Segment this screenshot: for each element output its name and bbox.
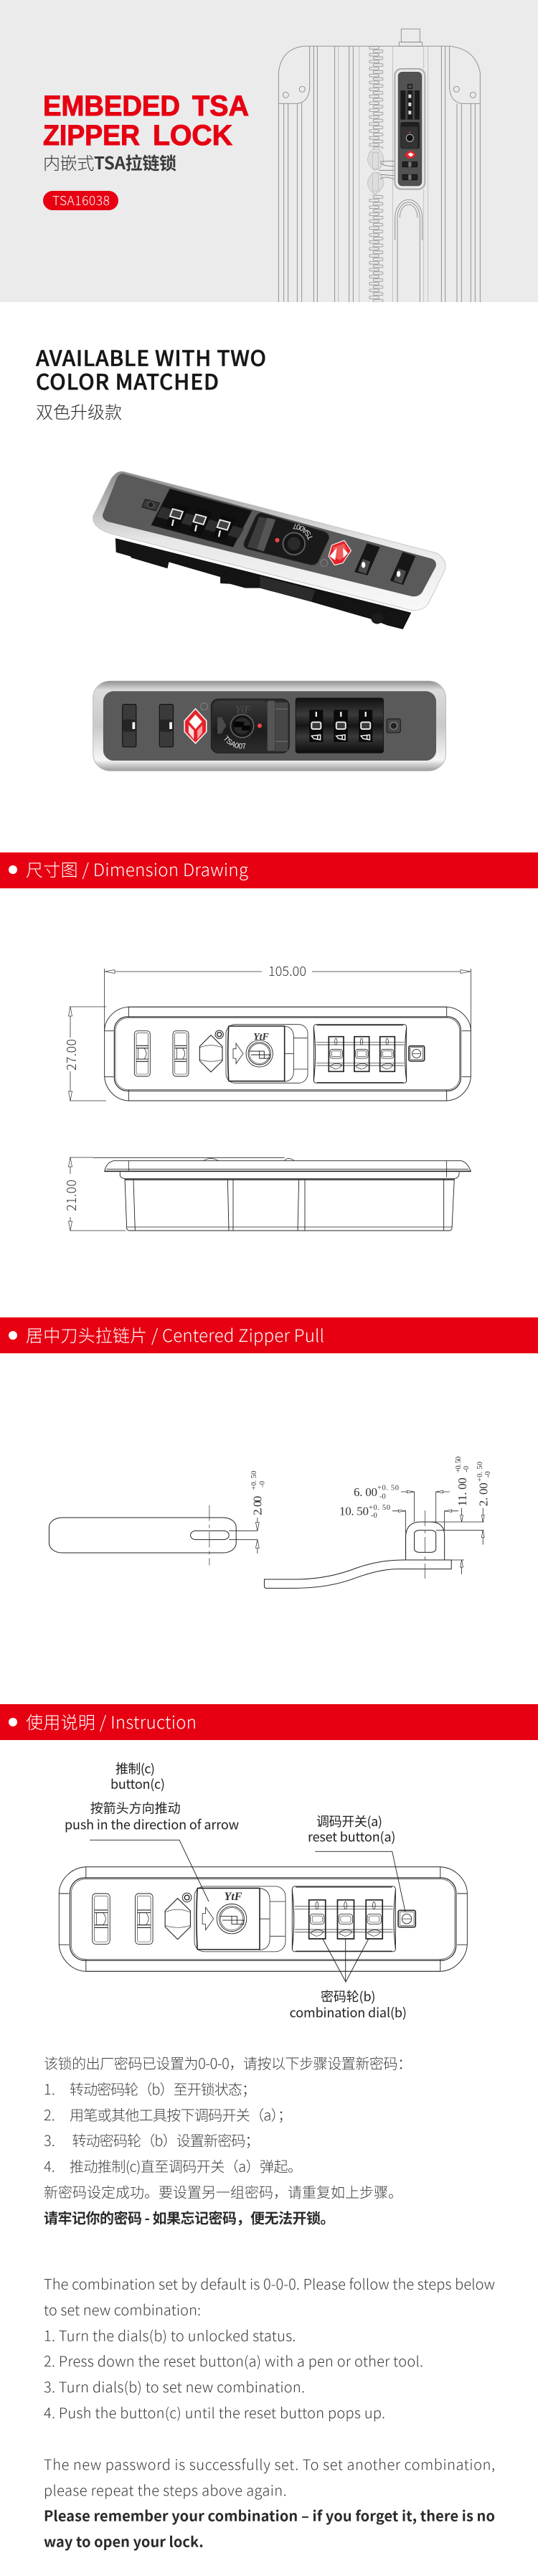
dimension: 6.00: +0. 50 xyxy=(377,1485,399,1493)
lock body underside xyxy=(116,539,410,629)
text block: English instructions: please repeat the steps above again. xyxy=(44,2479,287,2500)
text block: English instructions: 1. Turn the dials(b) to unlocked status. xyxy=(44,2325,296,2345)
callout: button c: button(c) xyxy=(110,1774,165,1793)
text block: English instructions: 3. Turn dials(b) to set new combination. xyxy=(44,2376,305,2397)
text block: English instructions xyxy=(44,2273,495,2552)
product photo: angled lock xyxy=(93,471,446,629)
diagram: lock front view with callouts xyxy=(59,1759,467,2022)
dimension: 2.00 slot: +0. 50 xyxy=(250,1471,258,1490)
combination dials xyxy=(296,698,384,753)
combination dials xyxy=(151,489,252,547)
callout: button c: 按箭头方向推动 xyxy=(90,1799,181,1818)
dimension: 2.00 slot: 2. 00 xyxy=(251,1496,265,1515)
red diamond logo xyxy=(184,703,208,743)
drawing: zipper pull side view xyxy=(264,1457,492,1588)
dimension: 11.00 xyxy=(455,1457,471,1506)
text block: English instructions: Please remember your combination – if you forget it, there is no xyxy=(44,2505,495,2526)
text block: Chinese instructions: 1. xyxy=(44,2078,55,2099)
callout: combination dial b: combination dial(b) xyxy=(290,2003,407,2022)
text block: Chinese instructions: 转动密码轮（b）设置新密码； xyxy=(72,2130,260,2150)
text block: English instructions: 4. Push the button(c) until the reset button pops up. xyxy=(44,2402,385,2422)
heading: available colours: COLOR MATCHED xyxy=(36,365,219,396)
dimension: 6.00 xyxy=(354,1485,399,1500)
callout: button c: 推制(c) xyxy=(115,1759,155,1778)
dimension: 27.00 height xyxy=(62,1007,106,1101)
section bar: dimension drawing: 尺寸图 / Dimension Drawing xyxy=(26,856,248,881)
section bar: centered zipper pull xyxy=(0,1317,538,1353)
title: ZIPPER xyxy=(43,120,140,151)
callout: combination dial b xyxy=(290,1938,407,2022)
dimension: 6.00: -0 xyxy=(379,1493,386,1500)
dimension: 2.00 xyxy=(476,1462,492,1506)
text block: English instructions: to set new combination: xyxy=(44,2299,201,2320)
text block: Chinese instructions xyxy=(44,2052,412,2227)
red diamond logo xyxy=(321,540,351,567)
callout: reset button a: 调码开关(a) xyxy=(316,1812,382,1830)
brand mark: YiF xyxy=(235,704,251,715)
dimension: 10.50: -0 xyxy=(371,1512,377,1520)
dimension: 2.00: -0 xyxy=(484,1472,492,1477)
front view outline xyxy=(105,1007,471,1101)
grey plate xyxy=(103,691,436,761)
title: LOCK xyxy=(153,120,232,151)
dimension: 21.00 height xyxy=(62,1157,126,1231)
slide slots xyxy=(123,705,173,747)
drawing: front view with dimensions xyxy=(62,962,471,1101)
dimension: 11.00: +0. 50 xyxy=(455,1457,463,1473)
product photo: front-facing lock xyxy=(93,680,446,771)
lock label upside down: TSA007 xyxy=(293,524,313,540)
dimension: 2.00 slot: -0 xyxy=(258,1481,266,1487)
text block: English instructions: The combination set by default is 0-0-0. Please follow the steps below xyxy=(44,2273,495,2294)
illustration: suitcase line drawing with lock xyxy=(278,29,480,302)
mini lock on suitcase xyxy=(395,69,425,189)
dimension: 2.00 slot xyxy=(250,1471,266,1515)
dimension: 2.00: +0. 50 xyxy=(476,1462,484,1482)
badge: model number: TSA16038 xyxy=(52,192,110,210)
text block: Chinese instructions: 该锁的出厂密码已设置为0-0-0，请按以下步骤设置新密码： xyxy=(44,2052,412,2073)
grey plate xyxy=(103,474,436,596)
reset button xyxy=(142,499,159,511)
dimension: 10.50: +0. 50 xyxy=(369,1504,390,1512)
brand mark on drawing: YtF xyxy=(225,1891,242,1903)
side view outline xyxy=(93,1157,471,1231)
callout: combination dial b: 密码轮(b) xyxy=(321,1987,376,2006)
dimension: 11.00: -0 xyxy=(463,1466,471,1472)
text block: English instructions: 2. Press down the reset button(a) with a pen or other tool. xyxy=(44,2350,423,2371)
callout: button c xyxy=(65,1759,239,1902)
subheading: two-colour upgrade: 双色升级款 xyxy=(36,398,122,423)
heading: available colours: AVAILABLE WITH TWO xyxy=(36,341,266,372)
text block: Chinese instructions: 4. xyxy=(44,2156,55,2176)
zipper teeth xyxy=(369,46,383,302)
dimension: 10.50 xyxy=(339,1504,390,1520)
subtitle: 内嵌式TSA拉链锁 xyxy=(43,149,176,174)
panel: hero background xyxy=(0,0,538,302)
lock label: TSA007 xyxy=(224,735,245,749)
text block: Chinese instructions: 3. xyxy=(44,2130,55,2150)
dimension: 105.00 width xyxy=(105,962,471,1031)
zipper pulls xyxy=(367,149,398,194)
lock line drawing xyxy=(59,1867,467,1971)
text block: Chinese instructions: 用笔或其他工具按下调码开关（a）； xyxy=(70,2104,292,2125)
heading: available colours xyxy=(36,341,266,396)
text block: Chinese instructions: 转动密码轮（b）至开锁状态； xyxy=(70,2078,256,2099)
dimension: 10.50: 10. 50 xyxy=(339,1505,369,1518)
section bar: centered zipper pull: 居中刀头拉链片 / Centered Zipper Pull xyxy=(26,1322,324,1347)
key module xyxy=(244,512,329,565)
title xyxy=(43,90,249,151)
brand mark on drawing: YtF xyxy=(253,1032,270,1043)
dimension: 11.00: 11. 00 xyxy=(456,1477,469,1506)
suitcase outline xyxy=(278,29,480,302)
slide slots xyxy=(354,543,415,585)
drawing: zipper pull top view xyxy=(49,1471,266,1566)
key module xyxy=(211,699,290,753)
text block: Chinese instructions: 推动推制(c)直至调码开关（a）弹起。 xyxy=(70,2156,302,2176)
silver bezel xyxy=(93,681,445,771)
text block: Chinese instructions: 新密码设定成功。要设置另一组密码，请重复如上步骤。 xyxy=(44,2181,402,2201)
dimension: 6.00: 6. 00 xyxy=(354,1485,377,1499)
dimension: 2.00: 2. 00 xyxy=(476,1482,490,1506)
text block: English instructions: The new password is successfully set. To set another combination, xyxy=(44,2453,495,2474)
dimension: 27.00 height: 27.00 xyxy=(62,1039,80,1071)
section bar: dimension drawing xyxy=(0,852,538,888)
drawing: side view with dimensions xyxy=(62,1157,471,1231)
pull outline xyxy=(49,1505,259,1566)
text block: English instructions: way to open your lock. xyxy=(44,2531,204,2552)
title: EMBEDED xyxy=(43,90,180,122)
section bar: instruction xyxy=(0,1704,538,1740)
text block: Chinese instructions: 请牢记你的密码 - 如果忘记密码，便无法开锁。 xyxy=(44,2206,334,2227)
dimension: 21.00 height: 21.00 xyxy=(62,1180,80,1211)
callout: reset button a: reset button(a) xyxy=(308,1828,396,1846)
pull outline xyxy=(264,1490,484,1588)
dimension: 105.00 width: 105.00 xyxy=(268,962,306,980)
title: TSA xyxy=(192,90,249,122)
reset button xyxy=(387,719,400,733)
text block: Chinese instructions: 2. xyxy=(44,2104,55,2125)
callout: button c: push in the direction of arrow xyxy=(65,1815,239,1833)
section bar: instruction: 使用说明 / Instruction xyxy=(26,1708,197,1734)
silver bezel xyxy=(93,471,445,611)
callout: reset button a xyxy=(308,1812,405,1912)
